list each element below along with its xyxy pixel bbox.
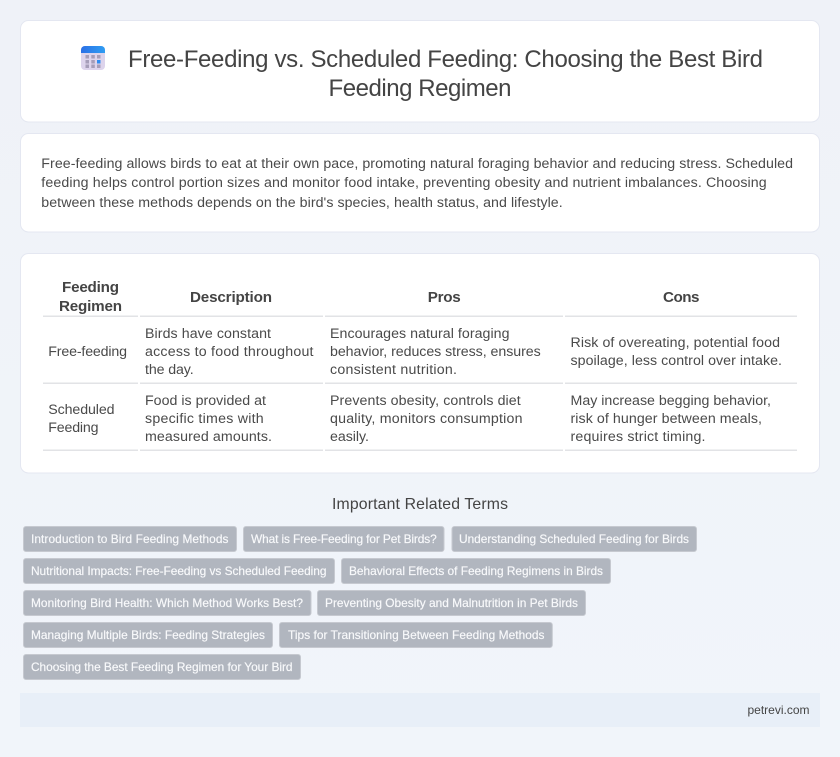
table row: free-feeding: spoilage, less control over intake. [570,353,782,369]
table row: scheduled feeding: easily. [330,429,369,445]
table row: free-feeding: behavior, reduces stress, ensures [330,344,541,360]
intro text: feeding helps control portion sizes and monitor food intake, preventing obesity and nutrient imbalances. Choosing [41,175,767,191]
table row: scheduled feeding: Food is provided at [145,393,266,409]
title [128,46,763,102]
footer [20,693,820,727]
tag [24,654,300,680]
table row: scheduled feeding: Prevents obesity, controls diet [330,393,521,409]
tag [452,526,696,552]
tag [318,590,586,616]
tag: Preventing Obesity and Malnutrition in Pet Birds [325,596,578,610]
table row: free-feeding: Risk of overeating, potential food [570,335,780,351]
panel: header [20,20,820,122]
intro text: Free-feeding allows birds to eat at their own pace, promoting natural foraging behavior and reducing stress. Scheduled [41,156,793,172]
tag: Monitoring Bird Health: Which Method Works Best? [31,596,303,610]
table header row: Pros [428,289,461,306]
tag: Understanding Scheduled Feeding for Birds [459,532,689,546]
tag [24,590,311,616]
table row: free-feeding [48,326,782,378]
tag [24,526,236,552]
tag: Tips for Transitioning Between Feeding Methods [288,628,545,642]
heading: related terms: Important Related Terms [332,496,508,513]
tag [24,622,272,648]
table row: free-feeding: access to food throughout [145,344,314,360]
table row: scheduled feeding: specific times with [145,411,264,427]
table row: free-feeding: Encourages natural foraging [330,326,510,342]
table row: scheduled feeding: May increase begging behavior, [570,393,771,409]
source credit: petrevi.com [748,703,810,717]
tag: Behavioral Effects of Feeding Regimens in Birds [349,564,603,578]
tag: What is Free-Feeding for Pet Birds? [251,532,437,546]
table row: scheduled feeding: measured amounts. [145,429,272,445]
intro text: between these methods depends on the bird's species, health status, and lifestyle. [41,195,563,211]
related term tags [24,526,696,680]
table row: scheduled feeding: quality, monitors consumption [330,411,522,427]
tag [280,622,552,648]
table row: scheduled feeding: risk of hunger between meals, [570,411,762,427]
tag [342,558,610,584]
table header row: Description [190,289,272,306]
panel: introduction [20,134,820,232]
tag [24,558,334,584]
title: Free-Feeding vs. Scheduled Feeding: Choosing the Best Bird [128,46,763,73]
icon: calendar [81,46,105,70]
table header row [59,279,700,315]
table row: scheduled feeding [48,393,771,445]
tag: Managing Multiple Birds: Feeding Strategies [31,628,265,642]
title: Feeding Regimen [328,75,512,102]
table row: scheduled feeding: Feeding [48,420,98,436]
tag: Introduction to Bird Feeding Methods [31,532,229,546]
table row: free-feeding: consistent nutrition. [330,362,457,378]
tag: Choosing the Best Feeding Regimen for Your Bird [31,660,292,674]
table row: scheduled feeding: Scheduled [48,402,114,418]
intro text [41,156,793,211]
table row: free-feeding: Free-feeding [48,344,127,360]
table header row: Cons [663,289,700,306]
tag: Nutritional Impacts: Free-Feeding vs Scheduled Feeding [31,564,326,578]
table row: free-feeding: the day. [145,362,194,378]
table row: scheduled feeding: requires strict timing. [570,429,706,445]
panel: comparison table [20,254,820,473]
table header row: Feeding [62,279,119,296]
table row: free-feeding: Birds have constant [145,326,271,342]
tag [244,526,444,552]
table header row: Regimen [59,298,122,315]
